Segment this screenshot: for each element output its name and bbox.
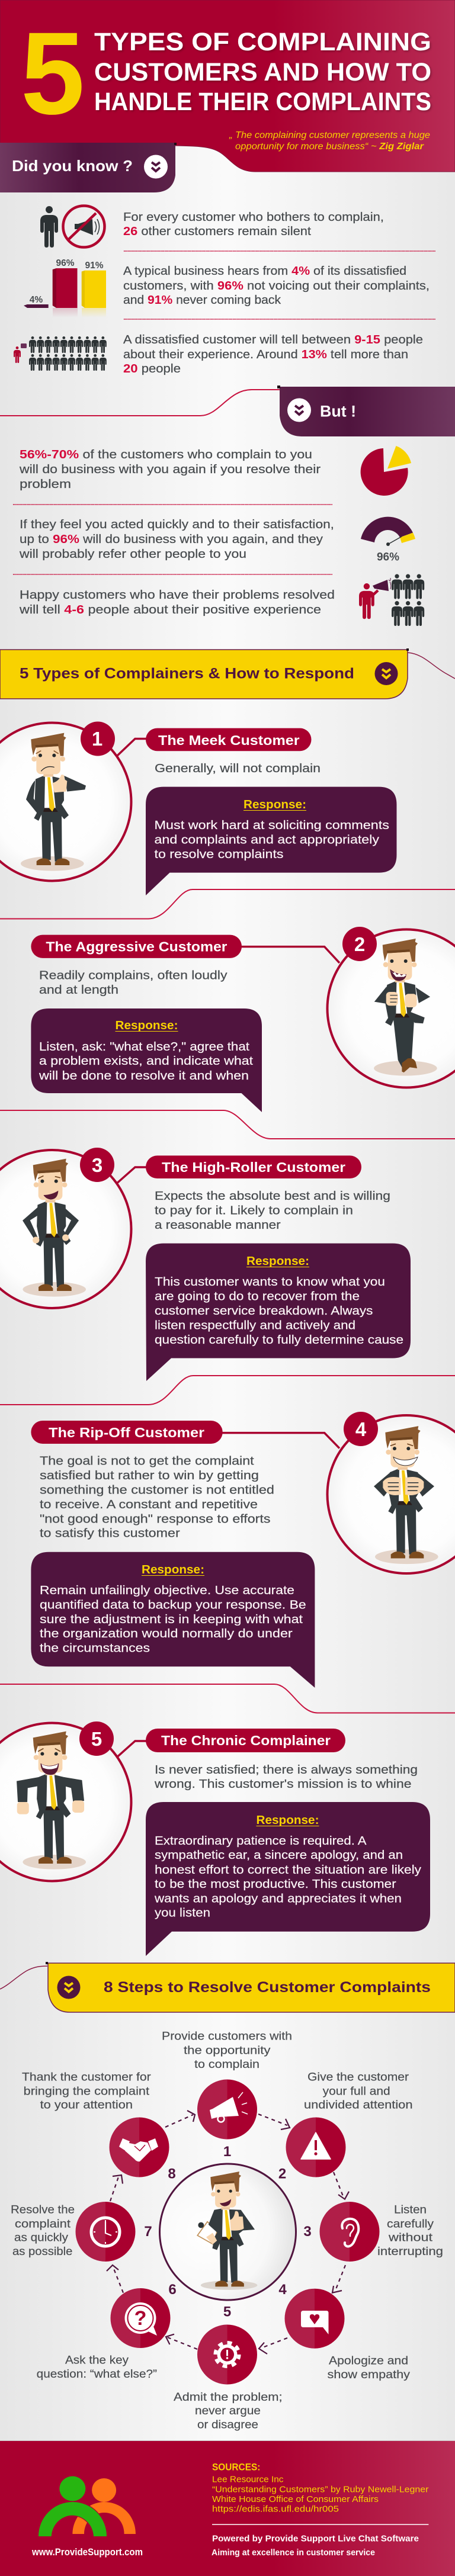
icon: warning xyxy=(301,2132,331,2159)
text: If they feel you acted quickly and to their satisfaction, xyxy=(20,518,334,531)
description: something the customer is not entitled xyxy=(40,1483,274,1497)
text xyxy=(377,2204,443,2258)
connector xyxy=(117,1167,148,1183)
text: question: “what else?” xyxy=(37,2368,157,2381)
step 8 xyxy=(22,2071,176,2182)
title pill xyxy=(146,728,312,751)
portrait circle xyxy=(327,1415,455,1573)
response bubble: a problem exists, and indicate what xyxy=(39,1054,253,1068)
response bubble: wants an apology and appreciates it when xyxy=(154,1892,402,1906)
response bubble: are going to do to recover from the xyxy=(155,1290,360,1303)
text: A dissatisfied customer will tell between 9-15 people xyxy=(123,333,423,346)
step 4: 4 xyxy=(278,2282,287,2298)
response bubble: you listen xyxy=(155,1906,210,1920)
step 7: 7 xyxy=(144,2224,152,2240)
center portrait circle xyxy=(160,2164,296,2300)
fact: 96 percent xyxy=(19,517,415,564)
title pill xyxy=(31,1421,223,1444)
text: carefully xyxy=(387,2218,434,2230)
icon: person with megaphone and audience xyxy=(359,574,424,626)
text xyxy=(22,2071,151,2112)
response bubble: question carefully to fully determine cause xyxy=(155,1333,403,1347)
text xyxy=(11,2204,75,2258)
fact: 26 silent customers xyxy=(40,206,384,248)
powered by: Aiming at excellence in customer service xyxy=(212,2548,375,2558)
response bubble: sympathetic ear, a sincere apology, and an xyxy=(155,1848,403,1862)
response bubble: will be done to resolve it and when xyxy=(39,1069,249,1083)
powered by xyxy=(212,2534,419,2558)
description: "not good enough" response to efforts xyxy=(40,1512,270,1525)
text: 26 other customers remain silent xyxy=(123,224,311,238)
response bubble: Response: xyxy=(142,1563,204,1576)
response bubble: Extraordinary patience is required. A xyxy=(155,1834,367,1848)
text: as possible xyxy=(12,2246,72,2258)
portrait circle xyxy=(327,930,455,1087)
description: wrong. This customer's mission is to whine xyxy=(154,1777,411,1791)
icon: gauge xyxy=(361,517,415,564)
response bubble: Must work hard at soliciting comments xyxy=(154,818,389,832)
number badge xyxy=(342,927,377,961)
text xyxy=(37,2355,157,2381)
quote xyxy=(229,130,430,152)
text: interrupting xyxy=(377,2246,443,2258)
section banner: 8 steps xyxy=(46,1962,455,2012)
text: without xyxy=(388,2232,433,2244)
response bubble xyxy=(31,1008,262,1112)
text: Ask the key xyxy=(65,2355,129,2367)
response bubble: Remain unfailingly objective. Use accurate xyxy=(40,1583,294,1597)
response bubble xyxy=(146,787,397,895)
fact: 56-70 percent xyxy=(19,446,411,496)
connector xyxy=(117,1741,148,1757)
icon: question bubble xyxy=(124,2302,157,2336)
response bubble: Response: xyxy=(256,1814,319,1827)
text: Listen xyxy=(394,2204,427,2216)
sources: White House Office of Consumer Affairs xyxy=(212,2494,379,2504)
icon: pie chart xyxy=(361,446,411,496)
icon: no megaphone xyxy=(63,206,104,248)
step 6: 6 xyxy=(168,2282,177,2298)
description xyxy=(154,1763,418,1791)
step 5: 5 xyxy=(223,2304,231,2320)
step 1 xyxy=(162,2031,292,2160)
icon: clock xyxy=(91,2218,120,2246)
step 1: 1 xyxy=(223,2144,231,2160)
fact: 4% 96% 91% xyxy=(24,258,430,317)
panel: the high-roller customer xyxy=(0,1148,411,1381)
icon: person xyxy=(40,206,58,248)
response bubble: and complaints and act appropriately xyxy=(154,833,380,847)
text: never argue xyxy=(195,2405,261,2417)
response bubble: This customer wants to know what you xyxy=(155,1275,385,1289)
bar chart: 96% xyxy=(56,258,75,268)
step 2: 2 xyxy=(278,2166,286,2182)
portrait circle xyxy=(0,1723,132,1881)
description: and at length xyxy=(39,983,118,997)
panel: the meek customer xyxy=(0,721,397,895)
text: show empathy xyxy=(327,2369,411,2381)
number badge: 5 xyxy=(91,1728,102,1750)
response bubble xyxy=(146,1802,430,1956)
title: CUSTOMERS AND HOW TO xyxy=(94,58,431,86)
character: aggressive customer xyxy=(374,939,437,1076)
text: and 91% never coming back xyxy=(123,293,281,307)
quote: „ The complaining customer represents a huge xyxy=(229,130,430,140)
text: Apologize and xyxy=(329,2355,408,2368)
number badge xyxy=(81,721,115,756)
section tab: but xyxy=(277,386,455,436)
section banner: 5 types xyxy=(0,648,409,699)
text: Provide customers with xyxy=(162,2031,292,2043)
character: helpful agent xyxy=(197,2172,257,2290)
panel: the chronic complainer xyxy=(0,1721,430,1956)
sources: “Understanding Customers” by Ruby Newell-Legner xyxy=(212,2484,428,2494)
description: to satisfy this customer xyxy=(40,1527,180,1540)
text: will probably refer other people to you xyxy=(19,547,246,561)
section tab: but: But ! xyxy=(320,403,356,420)
number badge: 1 xyxy=(92,728,102,750)
title pill: The Rip-Off Customer xyxy=(49,1425,204,1440)
text: customers, with 96% not voicing out their complaints, xyxy=(123,279,430,293)
text xyxy=(304,2071,412,2112)
connector xyxy=(117,739,148,756)
section banner: 8 steps: 8 Steps to Resolve Customer Complaints xyxy=(104,1979,431,1996)
title pill: The Meek Customer xyxy=(158,733,300,748)
text xyxy=(162,2031,292,2071)
icon: question bubble: ? xyxy=(134,2307,146,2330)
icon: crowd of people xyxy=(14,336,107,371)
step 4 xyxy=(278,2282,411,2381)
section tab: did you know xyxy=(0,143,177,192)
text xyxy=(123,333,423,375)
text: For every customer who bothers to complain, xyxy=(123,210,384,224)
step 5 xyxy=(174,2304,283,2432)
response bubble: Listen, ask: "what else?," agree that xyxy=(39,1040,249,1053)
response bubble: Response: xyxy=(115,1019,178,1032)
step 8: 8 xyxy=(168,2166,176,2182)
description xyxy=(155,1189,390,1232)
title pill: The Chronic Complainer xyxy=(161,1733,331,1748)
title pill xyxy=(146,1729,345,1752)
header background shape xyxy=(0,0,455,172)
description: The goal is not to get the complaint xyxy=(40,1454,254,1468)
sources: Lee Resource Inc xyxy=(212,2475,284,2485)
diagram: 8 steps cycle xyxy=(11,2031,443,2432)
text: Give the customer xyxy=(307,2071,409,2084)
quote: opportunity for more business“ ~ Zig Ziglar xyxy=(235,142,424,152)
response bubble: to be the most productive. This customer xyxy=(155,1877,396,1891)
text: or disagree xyxy=(197,2419,258,2432)
description: a reasonable manner xyxy=(155,1218,281,1232)
icon: gear xyxy=(216,2343,239,2366)
text xyxy=(19,518,334,561)
footer panel xyxy=(0,2441,455,2576)
description: Expects the absolute best and is willing xyxy=(155,1189,390,1203)
text: complaint xyxy=(15,2218,71,2230)
text: to complain xyxy=(194,2058,259,2071)
sources: https://edis.ifas.ufl.edu/hr005 xyxy=(212,2504,339,2514)
text: problem xyxy=(20,477,71,491)
text: Admit the problem; xyxy=(174,2391,283,2404)
description: to receive. A constant and repetitive xyxy=(40,1498,258,1511)
icon: megaphone xyxy=(210,2092,248,2122)
text: bringing the complaint xyxy=(24,2086,150,2098)
title pill xyxy=(31,935,242,958)
response bubble: customer service breakdown. Always xyxy=(155,1304,373,1318)
title pill: The Aggressive Customer xyxy=(46,939,227,955)
description: Readily complains, often loudly xyxy=(39,969,228,982)
number badge: 2 xyxy=(354,933,365,955)
number badge xyxy=(344,1412,378,1446)
bar chart: 91% xyxy=(85,261,104,271)
text: 56%-70% of the customers who complain to you xyxy=(20,448,312,461)
response bubble: Response: xyxy=(243,798,306,811)
text: as quickly xyxy=(14,2232,69,2244)
title: HANDLE THEIR COMPLAINTS xyxy=(94,88,431,116)
character: rip-off customer xyxy=(374,1426,438,1564)
description: Generally, will not complain xyxy=(155,762,321,775)
number badge: 4 xyxy=(355,1418,367,1440)
response bubble xyxy=(146,1244,411,1381)
sources: SOURCES: xyxy=(212,2462,260,2473)
response bubble: sure the adjustment is in keeping with what xyxy=(40,1613,303,1626)
text: Resolve the xyxy=(11,2204,75,2216)
powered by: Powered by Provide Support Live Chat Software xyxy=(212,2534,419,2544)
portrait circle xyxy=(0,722,132,881)
step 3 xyxy=(303,2202,443,2262)
title pill: The High-Roller Customer xyxy=(162,1159,345,1175)
icon: handshake xyxy=(119,2138,158,2161)
description: to pay for it. Likely to complain in xyxy=(155,1204,353,1218)
response bubble: to resolve complaints xyxy=(154,847,283,861)
response bubble: the circumstances xyxy=(40,1642,150,1655)
text xyxy=(327,2355,411,2381)
header panel xyxy=(0,0,455,172)
big numeral 5: 5 xyxy=(21,8,85,139)
icon: gauge: 96% xyxy=(377,551,399,564)
number badge xyxy=(80,1148,114,1182)
sources xyxy=(212,2462,428,2514)
connector xyxy=(220,1433,339,1448)
text xyxy=(19,448,321,491)
icon: ear xyxy=(342,2219,358,2246)
text xyxy=(123,264,430,307)
text: your full and xyxy=(323,2086,390,2098)
step 7 xyxy=(11,2202,152,2262)
description: Is never satisfied; there is always something xyxy=(155,1763,418,1777)
bar chart: 4% xyxy=(30,295,43,305)
description: satisfied but rather to win by getting xyxy=(40,1469,259,1482)
text: about their experience. Around 13% tell more than xyxy=(123,348,408,361)
response bubble: listen respectfully and actively and xyxy=(155,1318,355,1332)
text: will tell 4-6 people about their positive experience xyxy=(19,603,321,616)
response bubble xyxy=(31,1552,315,1688)
icon: heart bubble xyxy=(301,2311,328,2334)
response bubble: Response: xyxy=(246,1255,309,1268)
response bubble: the organization would normally do under xyxy=(40,1627,293,1640)
panel: the rip-off customer xyxy=(31,1412,455,1688)
response bubble: quantified data to backup your response. Be xyxy=(40,1598,306,1611)
panel: the aggressive customer xyxy=(31,927,455,1112)
fact: happy customers xyxy=(19,574,424,626)
text xyxy=(19,588,335,616)
section banner: 5 types: 5 Types of Complainers & How to Respond xyxy=(20,666,354,682)
text: the opportunity xyxy=(184,2045,271,2057)
character: high-roller customer xyxy=(23,1159,86,1297)
number badge: 3 xyxy=(92,1154,102,1176)
connector xyxy=(239,947,339,963)
description xyxy=(40,1454,274,1540)
bar chart xyxy=(24,258,106,317)
logo: www.ProvideSupport.com xyxy=(31,2547,143,2558)
text: will do business with you again if you resolve their xyxy=(19,462,321,476)
text: A typical business hears from 4% of its dissatisfied xyxy=(123,264,406,278)
portrait circle xyxy=(0,1150,132,1308)
title xyxy=(94,28,431,116)
description xyxy=(39,969,228,997)
text xyxy=(174,2391,283,2432)
character: meek customer xyxy=(21,733,86,871)
text xyxy=(123,210,384,238)
text: to your attention xyxy=(40,2099,133,2112)
step 2 xyxy=(278,2071,412,2182)
step 3: 3 xyxy=(303,2224,312,2240)
step 6 xyxy=(37,2282,177,2381)
title pill xyxy=(146,1155,361,1178)
fact: word of mouth xyxy=(14,333,423,375)
text: undivided attention xyxy=(304,2099,412,2112)
response bubble: honest effort to correct the situation are likely xyxy=(155,1863,422,1877)
number badge xyxy=(79,1721,114,1756)
character: chronic complainer xyxy=(17,1732,86,1870)
text: 20 people xyxy=(123,362,181,375)
logo xyxy=(31,2477,143,2558)
text: Thank the customer for xyxy=(22,2071,151,2084)
title: TYPES OF COMPLAINING xyxy=(94,28,431,56)
section tab: did you know: Did you know ? xyxy=(12,157,133,175)
text: up to 96% will do business with you again, and they xyxy=(20,532,323,546)
text: Happy customers who have their problems resolved xyxy=(20,588,335,602)
dashed arrows between steps xyxy=(107,2111,349,2354)
